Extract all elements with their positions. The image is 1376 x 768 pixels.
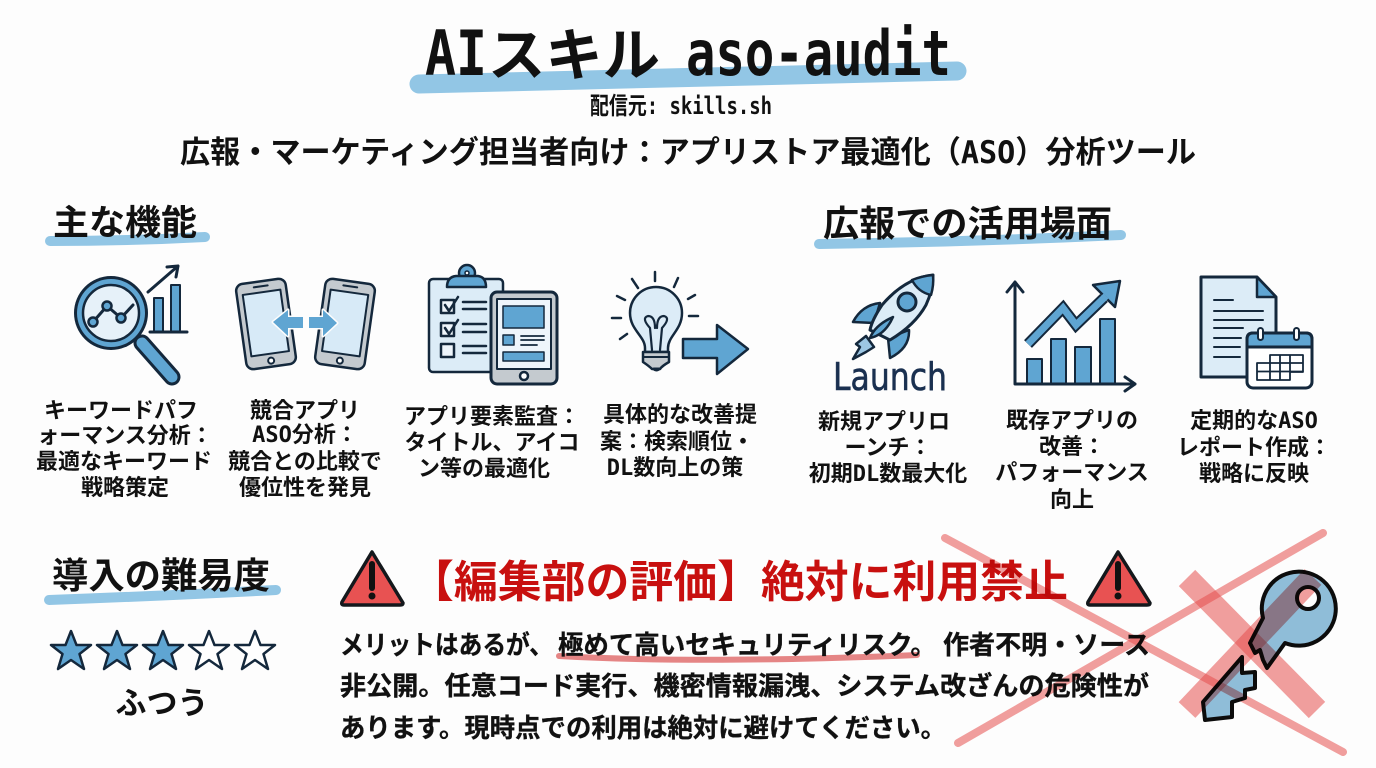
title: スキル <box>488 24 660 88</box>
icon label: Launch: Launch <box>833 355 947 399</box>
feature label: competitor analysis: 優位性を発見 <box>239 475 371 500</box>
feature label: element audit: アプリ要素監査： <box>404 404 580 429</box>
use case label: improve existing app: パフォーマンス <box>995 460 1149 485</box>
feature label: keyword analysis: ォーマンス分析： <box>37 423 213 448</box>
icon: light bulb and arrow <box>612 272 748 374</box>
feature label: keyword analysis: 最適なキーワード <box>36 449 212 474</box>
feature label: improvement proposals: 案：検索順位・ <box>600 429 754 454</box>
icon: audit checklist and tablet <box>429 265 557 384</box>
icon: comparing phones <box>235 278 376 370</box>
feature label: improvement proposals <box>600 402 757 481</box>
feature label: competitor analysis: 競合との比較で <box>228 449 382 474</box>
feature label: competitor analysis: ASO分析： <box>252 422 358 448</box>
feature label: keyword analysis: 戦略策定 <box>81 475 169 500</box>
icon: growth chart <box>1007 281 1135 391</box>
icon: report and calendar <box>1201 277 1312 388</box>
warning body text: 非公開。任意コード実行、機密情報漏洩、システム改ざんの危険性が <box>340 671 1149 701</box>
icon: broken key <box>1203 572 1336 720</box>
warning body text: メリットはあるが、 <box>340 630 553 660</box>
feature label: element audit: タイトル、アイコ <box>405 430 579 455</box>
use case label: new launch: 初期DL数最大化 <box>809 461 967 487</box>
use case label: new launch: ーンチ： <box>845 435 931 460</box>
warning body text <box>340 630 1150 743</box>
feature label: element audit <box>404 404 580 481</box>
feature label: keyword analysis <box>36 398 213 500</box>
icon: rocket launch <box>853 275 933 359</box>
icon: magnifier with chart <box>74 266 187 377</box>
panel: difficulty <box>49 555 276 721</box>
use case label: regular reports: レポート作成： <box>1177 435 1331 460</box>
warning body text: 極めて高いセキュリティリスク。 <box>558 630 936 660</box>
use case label: regular reports <box>1177 408 1331 486</box>
rating: 3 of 5 stars <box>51 631 275 669</box>
rating label: ふつう <box>116 686 208 721</box>
icon: warning left <box>342 552 403 605</box>
heading: main features: 主な機能 <box>53 204 197 243</box>
use case label: improve existing app: 向上 <box>1050 487 1094 512</box>
use case label: improve existing app <box>995 408 1149 512</box>
icon: warning right <box>1088 552 1150 605</box>
title: AI <box>425 17 487 90</box>
heading: difficulty: 導入の難易度 <box>52 555 270 596</box>
feature label: improvement proposals: DL数向上の策 <box>607 455 743 481</box>
feature label: element audit: ン等の最適化 <box>418 456 550 481</box>
panel: editorial warning <box>340 533 1343 752</box>
warning body text: あります。現時点での利用は絶対に避けてください。 <box>340 713 946 743</box>
panel: PR use cases <box>809 203 1331 512</box>
title: aso-audit <box>686 17 951 90</box>
panel: main features <box>36 204 757 500</box>
warning body text: 作者不明・ソース <box>943 630 1150 660</box>
use case label: new launch <box>809 409 967 487</box>
title <box>419 17 957 90</box>
use case label: improve existing app: 既存アプリの <box>1006 408 1138 433</box>
use case label: improve existing app: 改善： <box>1039 434 1105 459</box>
feature label: keyword analysis: キーワードパフ <box>44 398 198 423</box>
heading: PR use cases: 広報での活用場面 <box>823 203 1112 244</box>
warning heading: 【編集部の評価】絶対に利用禁止 <box>410 558 1068 607</box>
use case label: new launch: 新規アプリロ <box>818 409 950 434</box>
feature label: competitor analysis <box>228 398 382 500</box>
feature label: improvement proposals: 具体的な改善提 <box>603 402 757 427</box>
subtitle: 広報・マーケティング担当者向け：アプリストア最適化（ASO）分析ツール <box>180 135 1196 171</box>
feature label: competitor analysis: 競合アプリ <box>250 398 360 423</box>
crossed out marks <box>945 533 1343 752</box>
use case label: regular reports: 戦略に反映 <box>1199 461 1309 486</box>
use case label: regular reports: 定期的なASO <box>1190 408 1318 434</box>
source line: 配信元: skills.sh <box>590 92 772 120</box>
